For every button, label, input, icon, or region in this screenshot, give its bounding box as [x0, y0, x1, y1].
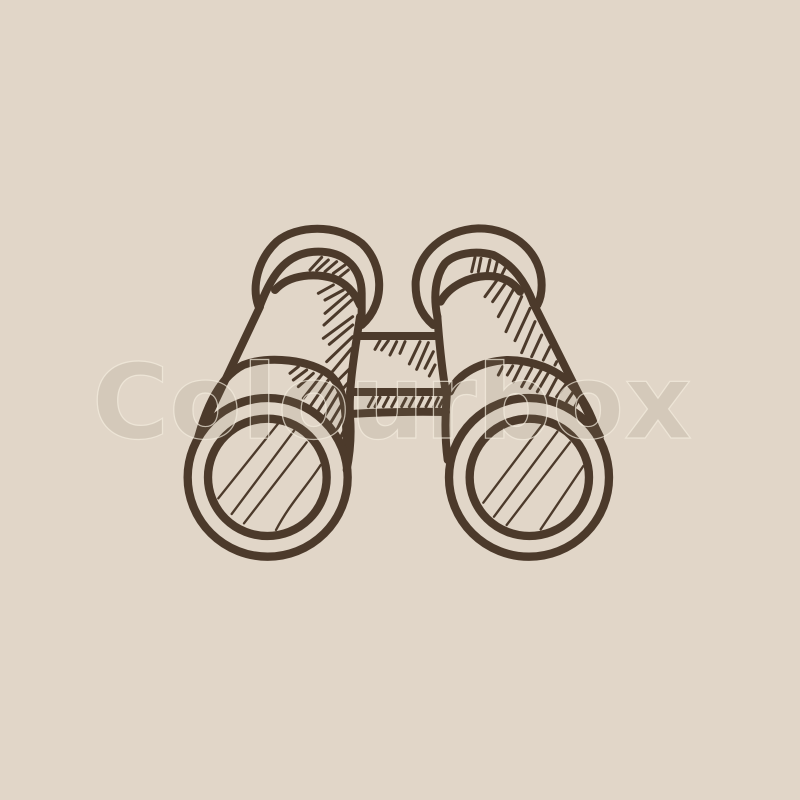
right objective rings — [449, 398, 609, 557]
left lens hatching — [218, 423, 321, 530]
right lens hatching — [483, 423, 583, 529]
bridge between barrels — [350, 336, 447, 414]
right eyepiece and barrel outlines — [416, 228, 600, 460]
icon: binoculars — [188, 228, 609, 557]
left eyepiece and barrel outlines — [198, 229, 379, 470]
left barrel hatching — [290, 257, 397, 445]
watermark: Colourbox: Colourbox — [92, 343, 692, 463]
right barrel hatching — [400, 257, 578, 407]
left barrel — [188, 229, 397, 557]
right barrel — [400, 228, 609, 557]
left objective rings — [188, 398, 348, 557]
